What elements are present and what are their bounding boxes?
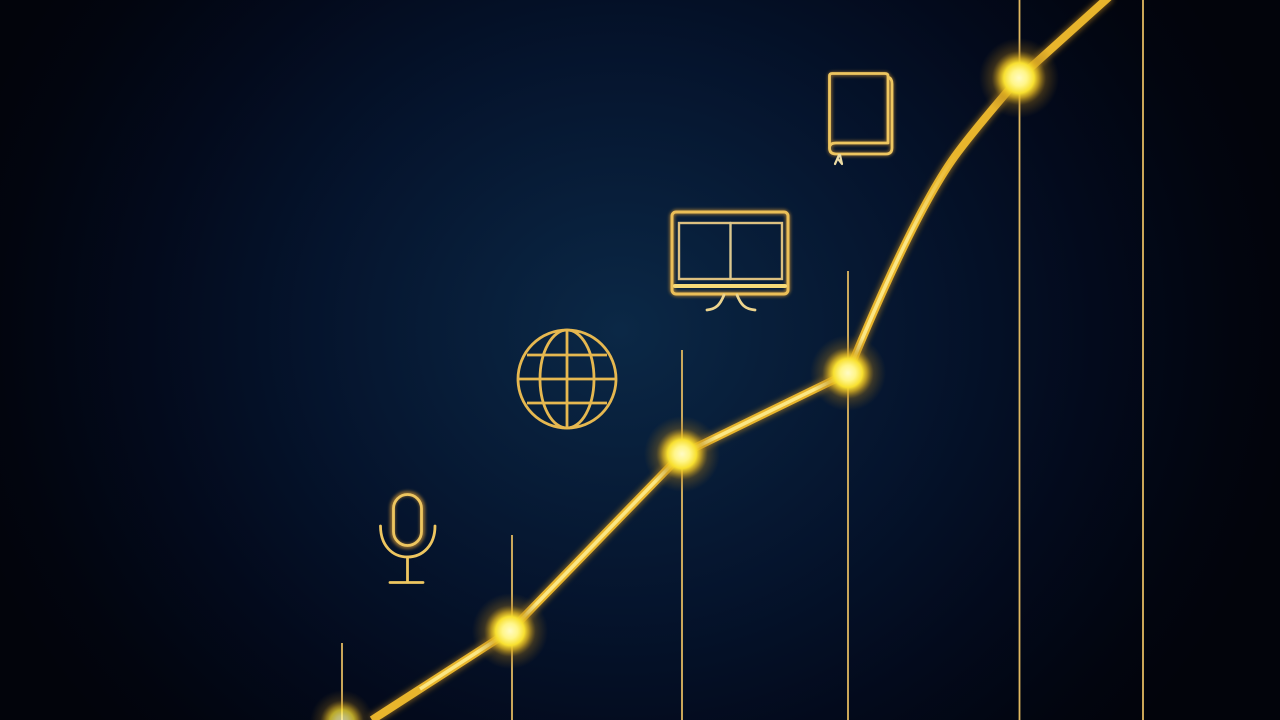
icon: monitor — [672, 212, 788, 310]
vertical gold lines — [342, 0, 1143, 720]
icon: book — [830, 74, 892, 164]
glowing data points — [310, 38, 1059, 720]
rising trend line — [372, 0, 1110, 720]
icon: microphone — [380, 494, 435, 582]
icon: globe — [518, 330, 616, 428]
